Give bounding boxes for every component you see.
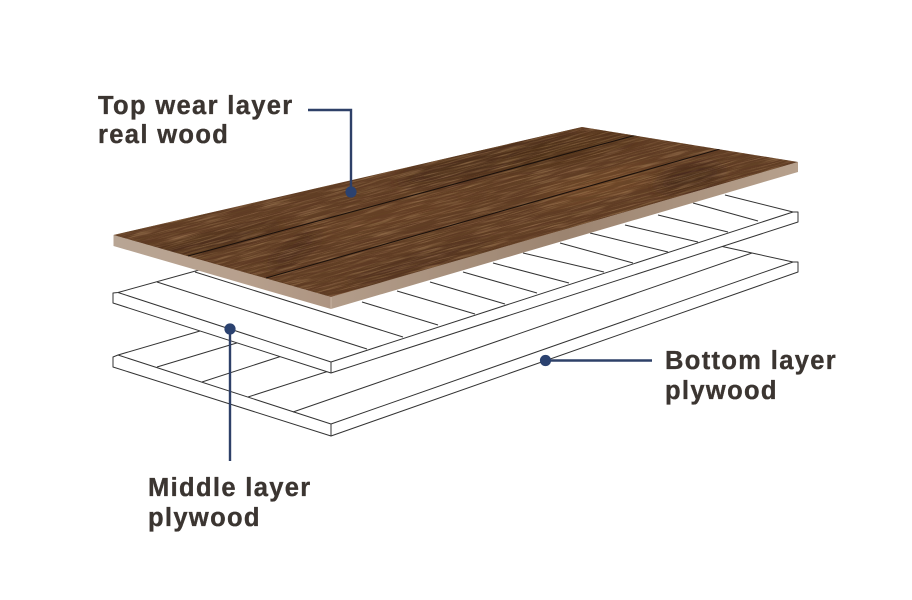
label: middle layer: plywood xyxy=(148,504,261,532)
top wear layer: real wood board xyxy=(114,127,798,309)
callout: bottom layer xyxy=(540,355,652,366)
label: bottom layer: plywood xyxy=(665,377,778,405)
label: top wear layer: Top wear layer xyxy=(98,92,294,120)
label: bottom layer: Bottom layer xyxy=(665,347,837,375)
middle plywood layer xyxy=(113,195,798,373)
callout: middle layer xyxy=(224,323,236,461)
callout: top wear layer xyxy=(308,110,357,198)
label: top wear layer: real wood xyxy=(98,121,229,149)
label: middle layer: Middle layer xyxy=(148,474,312,502)
bottom plywood layer xyxy=(113,246,798,436)
